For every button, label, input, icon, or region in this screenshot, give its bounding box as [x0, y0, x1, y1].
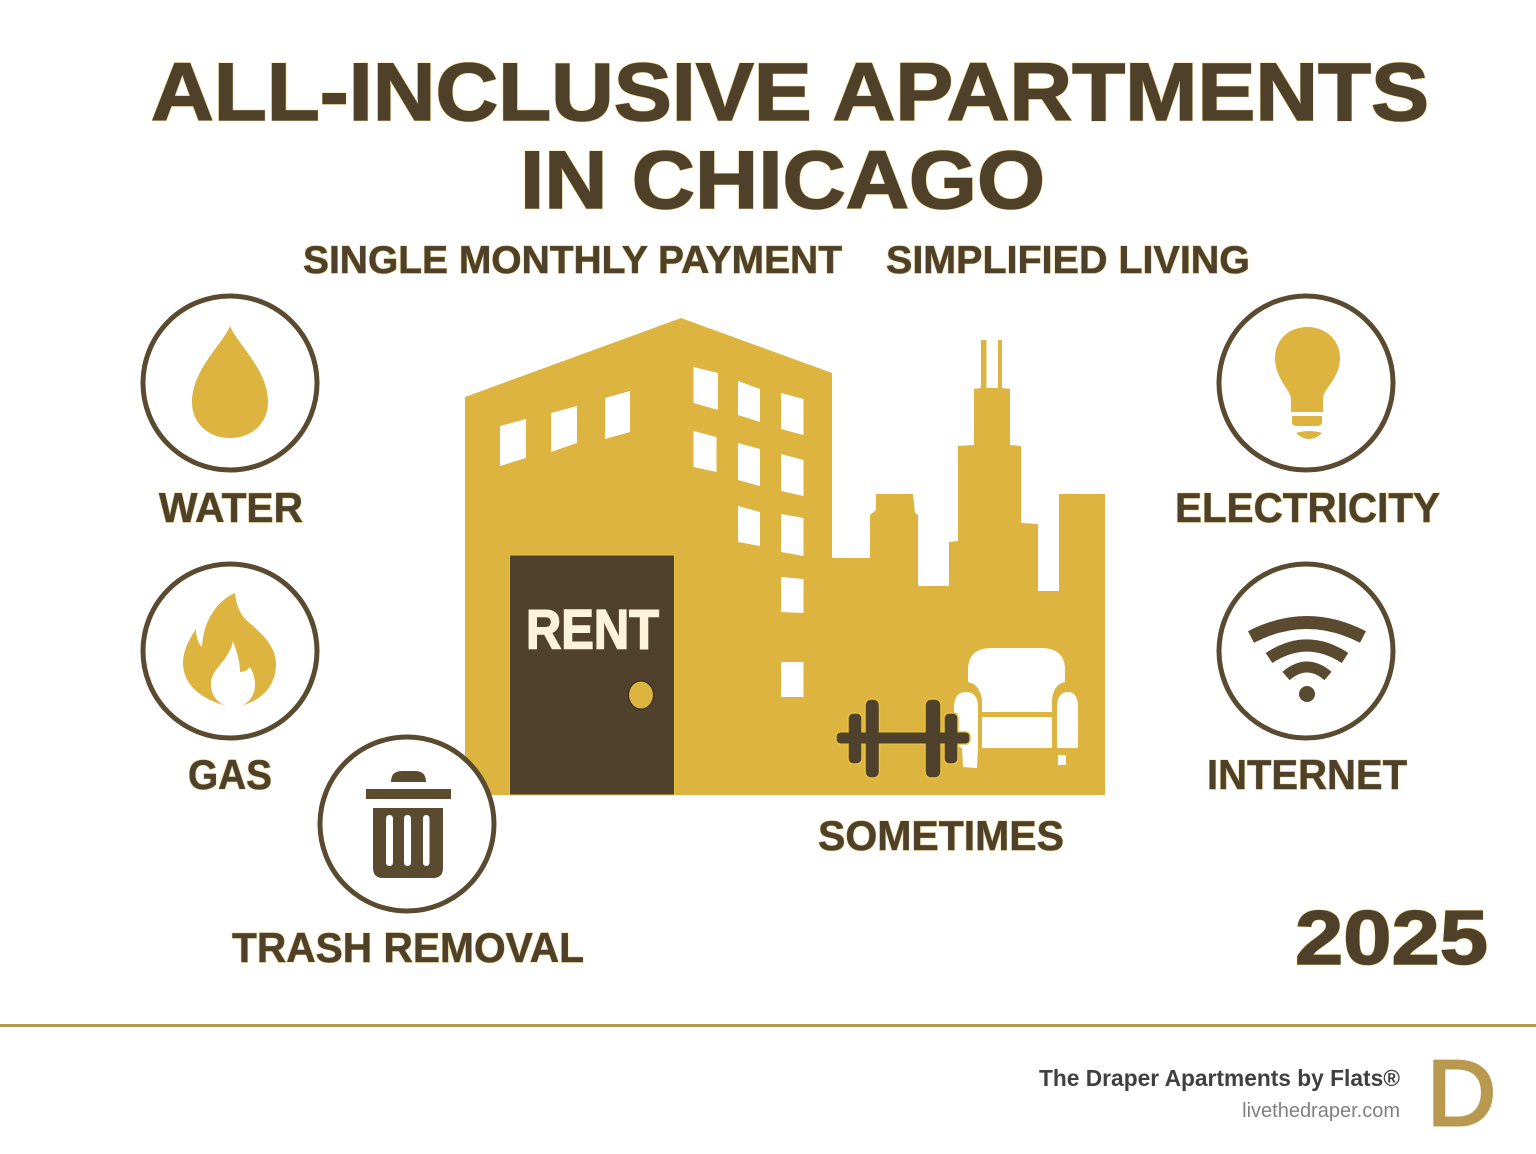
- subtitle: [303, 239, 1250, 282]
- building silhouette: [465, 318, 1105, 795]
- utility: electricity: [1175, 296, 1440, 531]
- icon: dumbbell: [836, 699, 970, 778]
- door with rent label: [510, 555, 674, 795]
- windows: [500, 367, 804, 697]
- title: IN CHICAGO: [520, 135, 1045, 226]
- icon: trash can: [366, 771, 451, 878]
- utility: gas: GAS: [188, 751, 272, 798]
- subtitle: SIMPLIFIED LIVING: [886, 239, 1250, 282]
- footer brand text: [1039, 1065, 1400, 1122]
- utility: gas: [143, 564, 317, 798]
- door with rent label: RENT: [526, 598, 659, 660]
- title: ALL-INCLUSIVE APARTMENTS: [151, 47, 1429, 138]
- utility: electricity: ELECTRICITY: [1175, 484, 1440, 531]
- utility: internet: INTERNET: [1207, 751, 1407, 798]
- building and Chicago skyline illustration: [465, 318, 1105, 795]
- icon: water drop: [192, 326, 268, 438]
- utility: trash removal: TRASH REMOVAL: [232, 924, 584, 971]
- icon: flame: [183, 593, 276, 706]
- icon: light bulb: [1275, 327, 1340, 439]
- subtitle: SINGLE MONTHLY PAYMENT: [303, 239, 842, 282]
- footer brand text: livethedraper.com: [1242, 1100, 1400, 1122]
- utility: water: [143, 296, 317, 531]
- label: sometimes: SOMETIMES: [818, 812, 1064, 859]
- utility: water: WATER: [159, 484, 303, 531]
- footer brand text: The Draper Apartments by Flats®: [1039, 1065, 1400, 1091]
- year: 2025: [1295, 896, 1488, 981]
- footer logo: D: [1427, 1041, 1496, 1145]
- utility: internet: [1207, 564, 1407, 798]
- utility: trash removal: [232, 737, 584, 971]
- icon: wifi: [1251, 622, 1363, 702]
- icon: armchair: [954, 648, 1078, 768]
- title: [151, 47, 1429, 226]
